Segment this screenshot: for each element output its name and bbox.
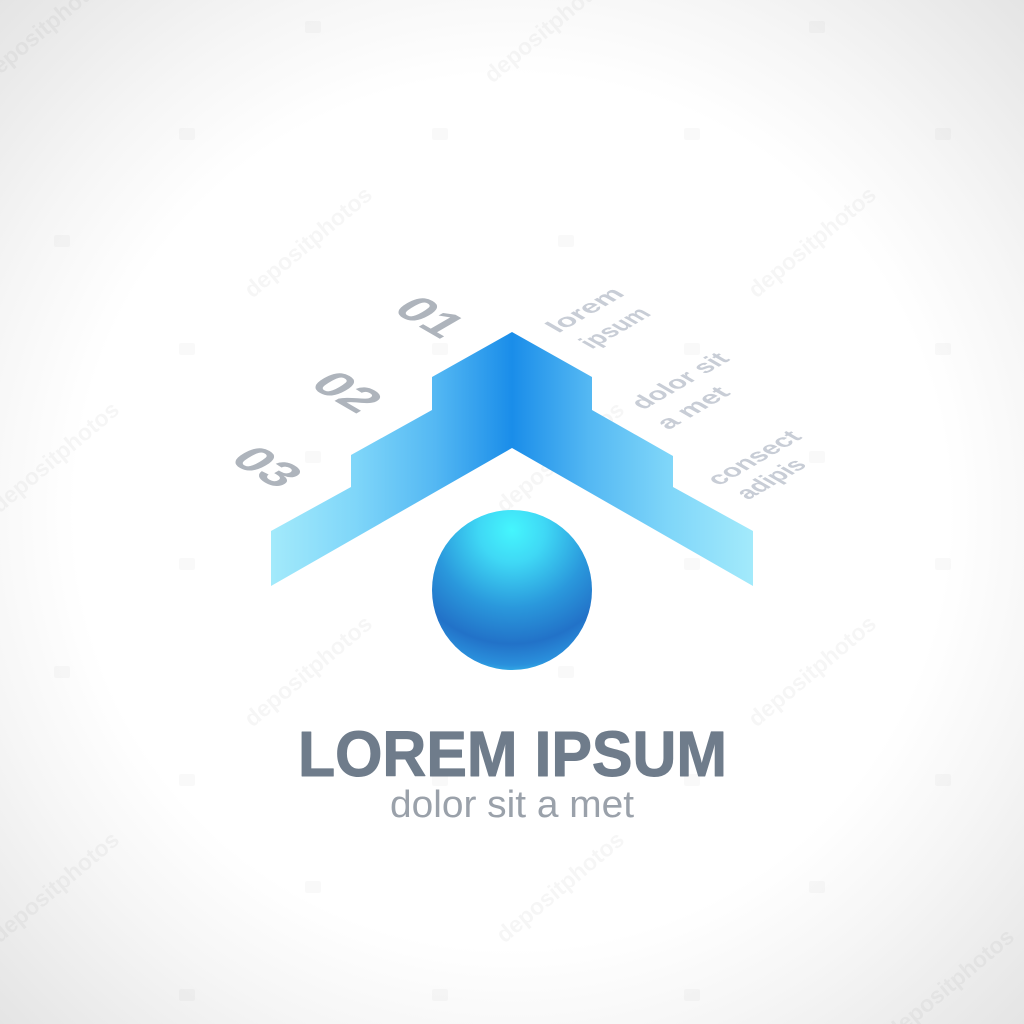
- caption: dolor sit a met: dolor sit: [624, 348, 737, 413]
- number 03: 03: [218, 439, 314, 495]
- caption: lorem ipsum: [539, 283, 658, 353]
- watermarks: depositphotos: [491, 826, 629, 948]
- caption: consect adipis: consect: [700, 426, 809, 489]
- sphere: [432, 510, 592, 670]
- caption: lorem ipsum: ipsum: [573, 303, 658, 353]
- caption: lorem ipsum: lorem: [539, 283, 631, 337]
- subtitle: dolor sit a met: [390, 784, 634, 826]
- title: LOREM IPSUM: [298, 718, 727, 790]
- watermarks: depositphotos: [239, 181, 377, 303]
- watermarks: depositphotos: [239, 610, 377, 732]
- number 02: 02: [298, 364, 394, 420]
- roof: right half: [512, 332, 753, 586]
- watermarks: depositphotos: [743, 610, 881, 732]
- caption: dolor sit a met: a met: [649, 382, 737, 433]
- caption: consect adipis: adipis: [729, 455, 813, 503]
- watermarks: depositphotos: [491, 396, 629, 518]
- number 01: 01: [381, 289, 477, 345]
- roof: left half: [271, 332, 512, 586]
- step captions: [539, 283, 813, 503]
- watermarks: depositphotos: [743, 181, 881, 303]
- number labels: [218, 289, 477, 495]
